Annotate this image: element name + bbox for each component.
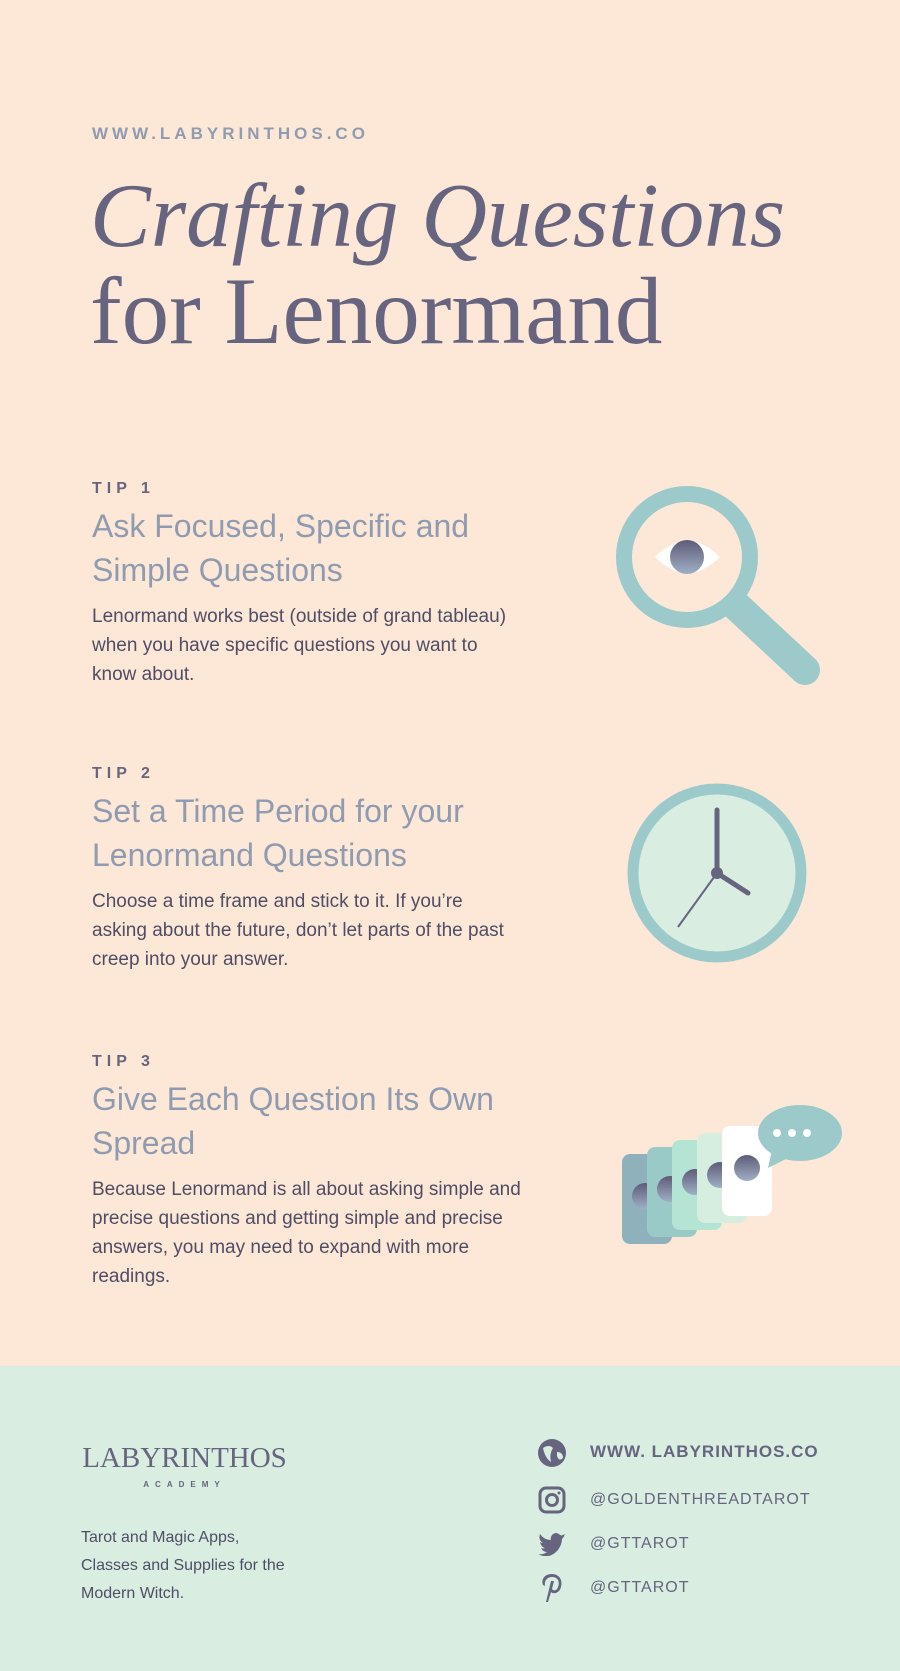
tip 3 text: Spread [92, 1125, 195, 1161]
tip 3 text: precise questions and getting simple and precise [92, 1208, 503, 1229]
tagline [81, 1529, 285, 1602]
tip 3 text: TIP 3 [92, 1053, 155, 1070]
tip 1 text: Ask Focused, Specific and [92, 508, 469, 544]
tagline: Classes and Supplies for the [81, 1557, 285, 1574]
icon: twitter [538, 1533, 565, 1556]
tagline: Modern Witch. [81, 1585, 184, 1602]
icon: pinterest [542, 1574, 562, 1602]
tip 3 text: answers, you may need to expand with more [92, 1237, 469, 1258]
logo: LABYRINTHOS [82, 1442, 287, 1474]
tip 3 text: readings. [92, 1266, 170, 1287]
icon: globe [538, 1439, 566, 1467]
social links: @GTTAROT [590, 1535, 690, 1552]
title [90, 165, 785, 364]
title: for Lenormand [90, 258, 662, 364]
tip 3 text: Give Each Question Its Own [92, 1081, 494, 1117]
logo: ACADEMY [143, 1480, 226, 1489]
title: Crafting Questions [90, 165, 785, 266]
icon: instagram [538, 1486, 566, 1514]
tip 1 text: TIP 1 [92, 480, 155, 497]
logo [82, 1442, 287, 1489]
social links: WWW. LABYRINTHOS.CO [590, 1442, 819, 1461]
tip 2 text [92, 765, 504, 970]
tip 1 text: know about. [92, 664, 194, 685]
icon: clock [628, 784, 806, 962]
site url: WWW.LABYRINTHOS.CO [92, 124, 369, 143]
tip 1 text: when you have specific questions you want to [92, 635, 478, 656]
tip 3 text [92, 1053, 521, 1287]
icon: cards with speech bubble [622, 1105, 842, 1244]
tip 1 text: Simple Questions [92, 552, 343, 588]
tip 2 text: Set a Time Period for your [92, 793, 464, 829]
tagline: Tarot and Magic Apps, [81, 1529, 239, 1546]
social links [538, 1439, 819, 1602]
tip 2 text: creep into your answer. [92, 949, 288, 970]
tip 1 text [92, 480, 506, 685]
footer panel [0, 1366, 900, 1671]
tip 2 text: Lenormand Questions [92, 837, 407, 873]
tip 2 text: Choose a time frame and stick to it. If you’re [92, 891, 463, 912]
social links: @GTTAROT [590, 1579, 690, 1596]
social links: @GOLDENTHREADTAROT [590, 1491, 811, 1508]
tip 2 text: asking about the future, don’t let parts of the past [92, 920, 504, 941]
tip 2 text: TIP 2 [92, 765, 155, 782]
tip 3 text: Because Lenormand is all about asking simple and [92, 1179, 521, 1200]
tip 1 text: Lenormand works best (outside of grand tableau) [92, 606, 506, 627]
icon: magnifying glass [616, 486, 820, 685]
